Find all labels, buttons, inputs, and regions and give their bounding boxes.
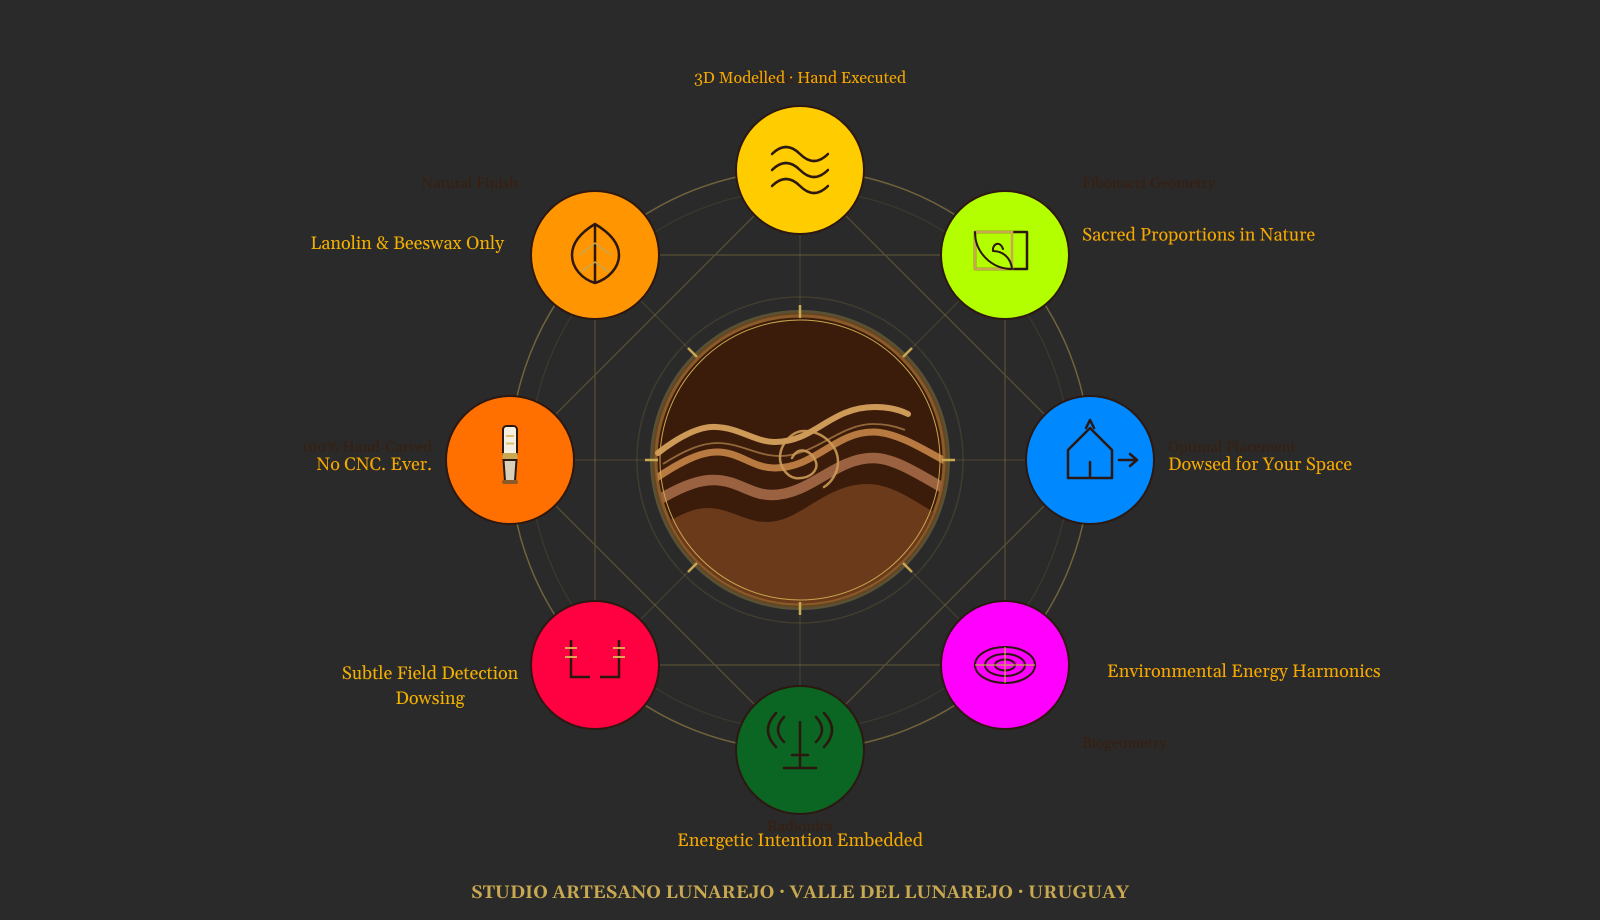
label: hand carved name: 100% Hand-Carved <box>302 439 432 458</box>
label: fibonacci name: Fibonacci Geometry <box>1082 175 1216 194</box>
label: dowsing line two: Dowsing <box>395 688 465 711</box>
label: environmental text: Environmental Energy Harmonics <box>1107 661 1381 684</box>
spiral <box>780 431 838 487</box>
node: radionics <box>736 686 864 814</box>
icon: house with arrow <box>1068 420 1137 478</box>
label: placement text: Dowsed for Your Space <box>1168 454 1352 477</box>
node: hand carved <box>446 396 574 524</box>
sacred geometry network <box>510 170 1090 750</box>
node: placement <box>1026 396 1154 524</box>
icon: L-rods <box>565 640 625 677</box>
icon: antenna <box>768 713 832 768</box>
icon: leaf <box>572 224 619 283</box>
label: biogeometry name: Biogeometry <box>1082 735 1167 754</box>
icon: waves <box>772 147 828 193</box>
node: fibonacci <box>941 191 1069 319</box>
compass ticks <box>645 305 955 615</box>
hill <box>670 484 934 604</box>
icon: chisel <box>502 426 518 484</box>
label: placement name: Optimal Placement <box>1168 439 1296 458</box>
inner gold ring <box>660 320 940 600</box>
wave two <box>655 432 950 479</box>
label: dowsing line one: Subtle Field Detection <box>342 663 519 686</box>
wave one <box>658 407 908 453</box>
label: fibonacci text: Sacred Proportions in Nature <box>1082 224 1316 248</box>
label: radionics name: Radionics <box>767 818 833 837</box>
icon: concentric ellipses <box>975 647 1035 683</box>
icon: golden rectangle <box>975 232 1027 269</box>
label: natural finish name: Natural Finish <box>422 175 518 194</box>
footer: STUDIO ARTESANO LUNAREJO · VALLE DEL LUNAREJO · URUGUAY <box>471 882 1130 905</box>
thin wave <box>663 424 905 464</box>
wave three <box>655 458 950 502</box>
label: hand carved text: No CNC. Ever. <box>316 454 432 477</box>
label: top secondary: Form Design <box>757 70 843 89</box>
node: dowsing <box>531 601 659 729</box>
label: natural finish text: Lanolin & Beeswax Only <box>310 233 505 256</box>
label: radionics text: Energetic Intention Embedded <box>677 830 924 853</box>
node: top waves <box>736 106 864 234</box>
label: top: 3D Modelled · Hand Executed <box>694 69 906 89</box>
centre emblem: carved wood disc <box>640 305 960 620</box>
node: biogeometry <box>941 601 1069 729</box>
node: natural finish <box>531 191 659 319</box>
